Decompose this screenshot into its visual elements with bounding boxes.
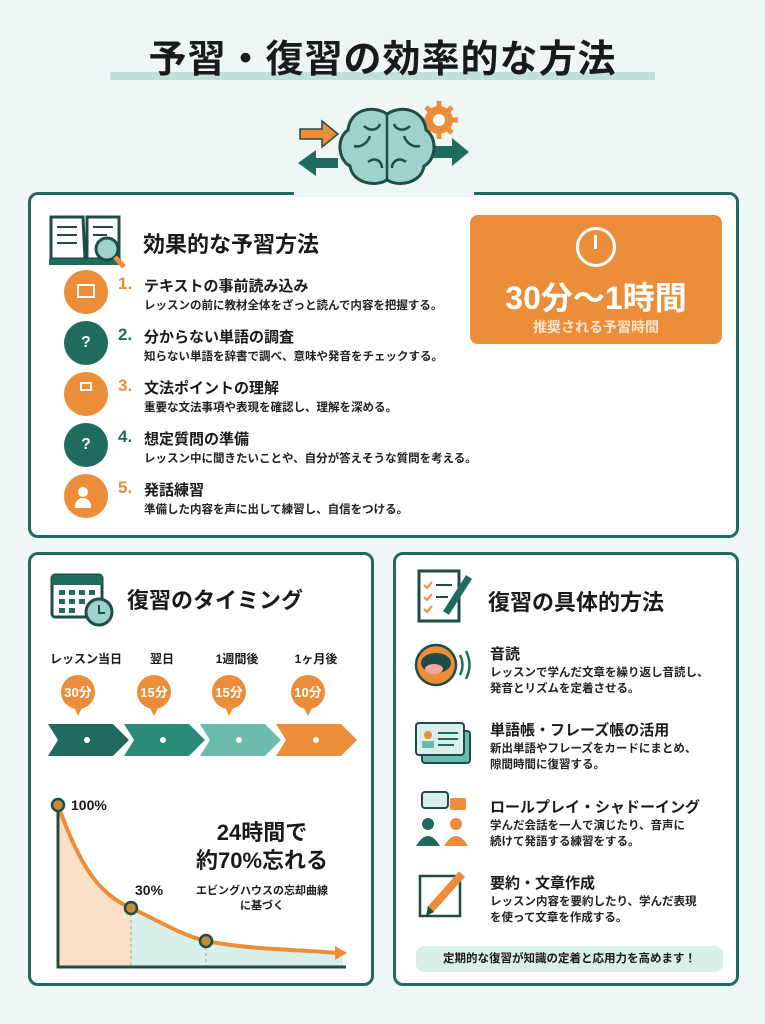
item 5: 5. <box>118 478 132 497</box>
method: summary writing: を使って文章を作成する。 <box>490 912 627 924</box>
item 1: レッスンの前に教材全体をざっと読んで内容を把握する。 <box>144 300 442 312</box>
panel: review timing <box>28 552 374 986</box>
item 2 <box>64 321 443 365</box>
item 1: 1. <box>118 274 132 293</box>
panel: preparation methods <box>28 192 739 538</box>
item 3 <box>64 372 397 416</box>
icon: calendar with clock <box>50 574 114 626</box>
item 4: 4. <box>118 427 132 446</box>
item 3: 重要な文法事項や表現を確認し、理解を深める。 <box>144 402 397 414</box>
item 2: 知らない単語を辞書で調べ、意味や発音をチェックする。 <box>144 351 443 363</box>
callout: recommended time <box>470 215 722 344</box>
method: read aloud: 音読 <box>490 646 520 663</box>
item 2: 2. <box>118 325 132 344</box>
chart: forgetting curve: 100% <box>71 797 107 813</box>
item 3: 文法ポイントの理解 <box>144 380 279 397</box>
chart: forgetting curve: 約70%忘れる <box>196 848 328 873</box>
icon: book with magnifier <box>49 216 126 269</box>
method: vocab cards: 隙間時間に復習する。 <box>490 759 605 771</box>
item 5: 準備した内容を声に出して練習し、自信をつける。 <box>144 504 408 516</box>
timeline: 1週間後 <box>216 652 258 666</box>
heading: timing: 復習のタイミング <box>127 588 303 613</box>
callout: bottom note <box>416 946 723 972</box>
item 4: ? <box>81 436 91 453</box>
panel: concrete review methods <box>393 552 739 986</box>
timeline: 30分 <box>64 685 92 700</box>
method: summary writing <box>418 872 697 924</box>
timeline: 15分 <box>215 685 243 700</box>
item 2: ? <box>81 334 91 351</box>
method: summary writing: レッスン内容を要約したり、学んだ表現 <box>490 896 697 908</box>
chart: forgetting curve: 24時間で <box>217 820 307 845</box>
item 4 <box>64 423 477 467</box>
item 3: 3. <box>118 376 132 395</box>
timeline: 10分 <box>294 685 322 700</box>
method: summary writing: 要約・文章作成 <box>490 875 595 892</box>
item 5: 発話練習 <box>144 482 204 499</box>
timeline: レッスン当日 <box>50 652 122 666</box>
title: 予習・復習の効率的な方法 <box>148 39 616 81</box>
item 4: レッスン中に聞きたいことや、自分が答えそうな質問を考える。 <box>144 453 477 465</box>
item 1: テキストの事前読み込み <box>144 278 309 295</box>
heading: preparation: 効果的な予習方法 <box>143 232 319 257</box>
heading: methods: 復習の具体的方法 <box>488 590 664 615</box>
method: role play <box>416 791 700 848</box>
chart: forgetting curve: 30% <box>135 882 164 898</box>
method: read aloud: 発音とリズムを定着させる。 <box>490 683 640 695</box>
chart: forgetting curve <box>50 797 347 968</box>
method: role play: 学んだ会話を一人で演じたり、音声に <box>490 820 685 832</box>
chart: forgetting curve: に基づく <box>240 898 284 912</box>
icon: checklist with pencil <box>418 570 472 622</box>
item 4: 想定質問の準備 <box>144 431 249 448</box>
method: vocab cards <box>415 722 696 771</box>
callout: recommended time: 30分〜1時間 <box>505 280 687 316</box>
timeline: 翌日 <box>150 652 174 666</box>
timeline <box>48 652 357 756</box>
item 2: 分からない単語の調査 <box>144 329 294 346</box>
timeline: 15分 <box>140 685 168 700</box>
callout: bottom note: 定期的な復習が知識の定着と応用力を高めます！ <box>443 953 696 965</box>
method: read aloud: レッスンで学んだ文章を繰り返し音読し、 <box>490 667 708 679</box>
timeline: 1ヶ月後 <box>295 652 337 666</box>
callout: recommended time: 推奨される予習時間 <box>533 319 659 335</box>
item 5 <box>64 474 408 518</box>
method: role play: 続けて発語する練習をする。 <box>490 836 640 848</box>
icon: brain with arrows and gear <box>298 101 469 185</box>
method: vocab cards: 単語帳・フレーズ帳の活用 <box>490 722 669 739</box>
method: role play: ロールプレイ・シャドーイング <box>490 799 700 816</box>
method: vocab cards: 新出単語やフレーズをカードにまとめ、 <box>490 743 696 755</box>
chart: forgetting curve: エビングハウスの忘却曲線 <box>196 883 328 897</box>
method: read aloud <box>414 644 708 695</box>
item 1 <box>64 270 442 314</box>
